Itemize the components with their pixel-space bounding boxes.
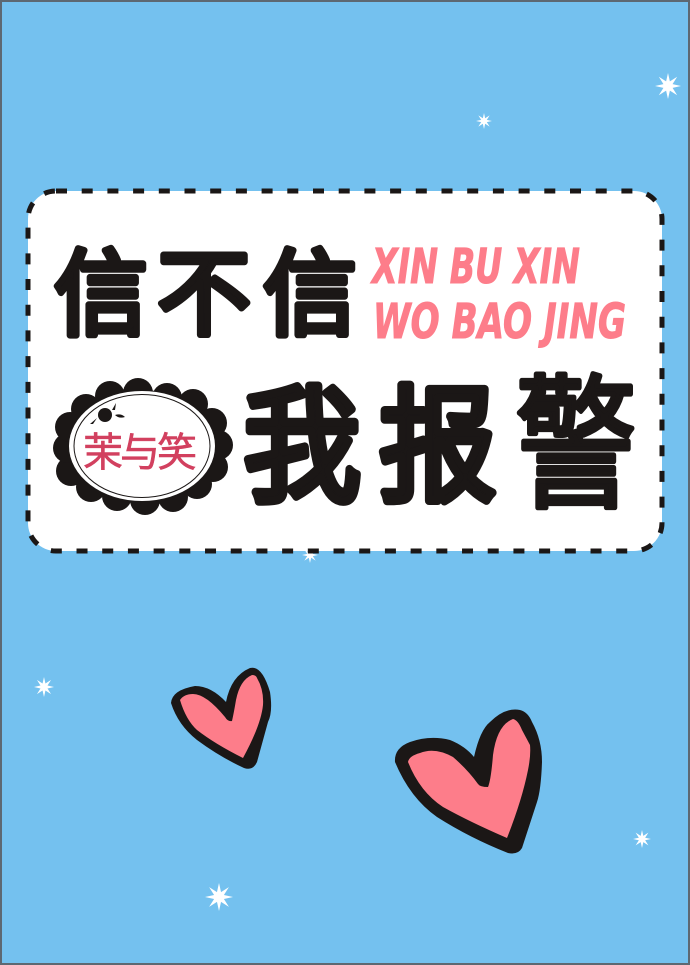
- star: lower right: [633, 830, 651, 848]
- icon: small heart: [171, 668, 271, 769]
- star: upper middle: [476, 113, 492, 129]
- star: left: [34, 677, 54, 697]
- author name: 茉与笑: [83, 420, 197, 478]
- title line 2: 我报: [243, 345, 497, 528]
- flower ornament: [90, 403, 125, 424]
- panel: title card: [28, 191, 662, 551]
- icon: large heart: [395, 710, 542, 853]
- pinyin line 1: XIN BU XIN: [370, 239, 580, 295]
- title line 2: 警: [515, 327, 637, 538]
- author badge: [53, 378, 233, 515]
- star: bottom: [205, 883, 233, 911]
- title line 2: [243, 327, 637, 538]
- title line 1: 信不信: [54, 219, 357, 355]
- star: top right: [655, 73, 681, 99]
- star: below card: [302, 547, 318, 563]
